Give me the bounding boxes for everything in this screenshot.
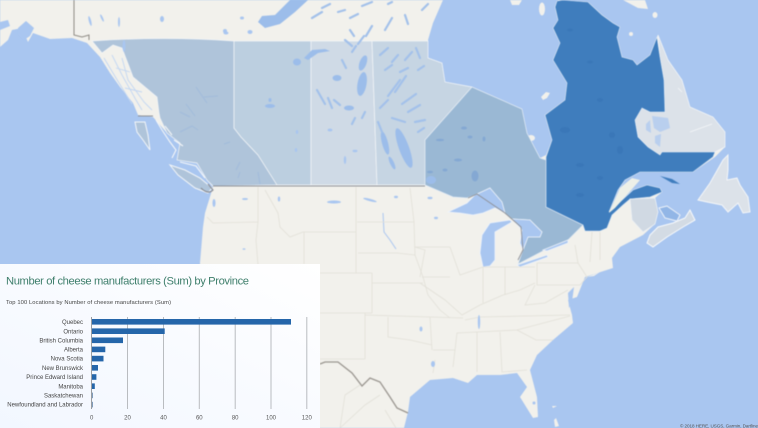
title: Number of cheese manufacturers (Sum) by Province (6, 276, 249, 288)
Alaska panhandle inlets (104, 55, 152, 110)
large lakes (258, 0, 436, 184)
category labels: New Brunswick (42, 366, 84, 372)
x axis labels: 40 (160, 416, 167, 422)
Great Lakes (448, 188, 568, 267)
Alaska inland water (0, 20, 34, 40)
province: Labrador part of Newfoundland and Labrador (635, 35, 725, 155)
category labels: Saskatchewan (44, 394, 83, 400)
province: British Columbia (92, 38, 277, 186)
province: Manitoba (372, 41, 472, 185)
category labels (7, 320, 84, 409)
x axis labels: 80 (232, 416, 239, 422)
US state borders (207, 187, 600, 428)
land: small Arctic and Hudson Bay islands (510, 0, 658, 141)
panel background (0, 264, 320, 428)
province: Newfoundland island (698, 155, 750, 213)
Pacific islands (135, 122, 212, 193)
grid lines (128, 317, 307, 409)
Mexico border (320, 362, 408, 413)
category labels: Nova Scotia (51, 357, 84, 363)
category labels: Alberta (64, 348, 84, 354)
British Columbia lakes (180, 87, 260, 184)
province: Saskatchewan (311, 41, 377, 185)
small lakes scattered across the prairies and the north (312, 2, 428, 132)
category labels: Quebec (62, 320, 83, 326)
category labels: British Columbia (39, 338, 84, 344)
x axis labels: 100 (266, 416, 277, 422)
Labrador lakes (646, 116, 670, 147)
subtitle: Top 100 Locations by Number of cheese manufacturers (Sum) (6, 300, 171, 306)
southern lakes and islands (420, 287, 574, 404)
x axis labels: 20 (124, 416, 131, 422)
bar chart (7, 317, 312, 422)
y axis line (90, 317, 92, 409)
St Lawrence estuary (609, 178, 640, 213)
US-Canada border (138, 116, 523, 260)
panel: bar chart card (0, 264, 320, 428)
British Columbia coastal fjords (156, 120, 205, 178)
province: Nova Scotia (647, 210, 695, 247)
category labels: Newfoundland and Labrador (7, 403, 83, 409)
Quebec darker lakes (560, 28, 623, 197)
x axis labels: 60 (196, 416, 203, 422)
category labels: Manitoba (58, 384, 84, 390)
Alaska border (74, 0, 89, 40)
province: Prince Edward Island (659, 206, 680, 221)
category labels: Prince Edward Island (26, 375, 83, 381)
bars (92, 319, 291, 407)
x axis labels: 120 (302, 416, 312, 422)
Ontario lakes (427, 126, 486, 182)
province: Alberta (234, 41, 311, 185)
x axis labels (90, 416, 312, 422)
Vancouver Island border arc (201, 184, 213, 192)
Missouri river (383, 213, 396, 249)
x axis labels: 0 (90, 416, 94, 422)
province: Quebec (545, 0, 715, 231)
Anticosti Island (660, 176, 680, 184)
province: Ontario (425, 87, 583, 264)
category labels: Ontario (63, 329, 84, 335)
province: New Brunswick (630, 198, 658, 232)
